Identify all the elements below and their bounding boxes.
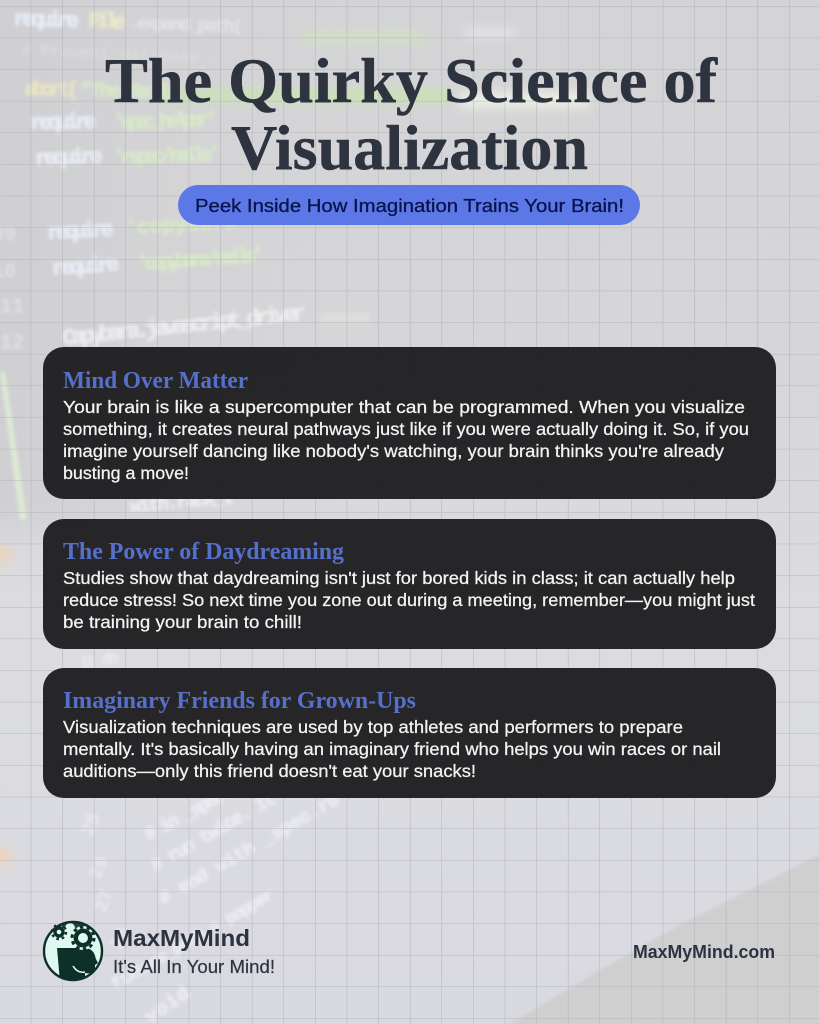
background: blurred code photo: 11 — [0, 296, 24, 319]
background: blurred code photo: with.rack_t — [129, 487, 235, 518]
panel: imaginary friends for grown-ups — [43, 668, 776, 798]
background: blurred code photo: 25 — [77, 810, 106, 839]
brand name: MaxMyMind — [113, 925, 250, 951]
background: blurred code photo: require — [46, 218, 114, 246]
background: blurred code photo: require — [51, 252, 120, 282]
background: blurred code photo: # in _spec.rb — [140, 773, 252, 846]
background: blurred code photo: fixture_path = popper — [108, 886, 278, 995]
heading: imaginary friends for grown-ups: Imaginary Friends for Grown-Ups — [63, 688, 416, 714]
text block: the power of daydreaming: reduce stress! So next time you zone out during a meeting, remember—you might just — [63, 590, 755, 610]
text block: the power of daydreaming: be training your brain to chill! — [63, 612, 302, 632]
text block: imaginary friends for grown-ups — [63, 717, 721, 781]
text block: mind over matter: Your brain is like a supercomputer that can be programmed. When you visualize — [63, 397, 745, 417]
background: blurred code photo: 'copybara/rails' — [136, 245, 265, 277]
title — [105, 46, 718, 183]
background: blurred code photo: 27 — [90, 887, 119, 916]
background: blurred code photo: .expand_path( — [128, 14, 243, 38]
text block: mind over matter: busting a move! — [63, 463, 189, 483]
title: The Quirky Science of — [105, 46, 718, 116]
background: blurred code photo: require — [13, 7, 80, 34]
background: blurred code photo: 28 — [106, 924, 135, 953]
background: blurred code photo: abort( — [24, 79, 79, 103]
text block: the power of daydreaming — [63, 568, 755, 632]
text block: imaginary friends for grown-ups: Visualization techniques are used by top athletes and performers to prepare — [63, 717, 683, 737]
heading: mind over matter: Mind Over Matter — [63, 368, 248, 394]
subtitle pill: Peek Inside How Imagination Trains Your Brain! — [195, 195, 624, 216]
title: Visualization — [231, 113, 588, 183]
text block: the power of daydreaming: Studies show that daydreaming isn't just for bored kids in class; it can actually help — [63, 568, 735, 588]
background: blurred code photo: # run twice. It is reco — [147, 751, 344, 877]
background: blurred code photo: "The Rails — [80, 80, 180, 105]
text block: mind over matter: imagine yourself dancing like nobody's watching, your brain thinks you're already — [63, 441, 724, 461]
background: blurred code photo: require — [30, 110, 97, 136]
background: blurred code photo: 'rspec/rails' — [112, 144, 221, 171]
panel: mind over matter — [43, 347, 776, 499]
text block: imaginary friends for grown-ups: auditions—only this friend doesn't eat your snacks! — [63, 761, 476, 781]
background: blurred code photo: 12 — [0, 332, 24, 355]
tagline: It's All In Your Mind! — [113, 957, 275, 977]
background: blurred code photo: 'spec_helper' — [112, 109, 218, 136]
icon: logo head with gears — [44, 918, 102, 982]
background: blurred code photo: File — [88, 9, 127, 35]
text block: mind over matter: something, it creates neural pathways just like if you were actually doing it. So, if you — [63, 419, 749, 439]
panel: the power of daydreaming — [43, 519, 776, 649]
subtitle pill — [178, 185, 640, 225]
background: blurred code photo: 'copybara' — [124, 211, 250, 241]
text block: imaginary friends for grown-ups: mentally. It's basically having an imaginary friend who helps you win races or nail — [63, 739, 721, 759]
background: blurred code photo: it do — [78, 650, 120, 674]
text block: mind over matter — [63, 397, 749, 483]
background: blurred code photo: Capybara.javascript_driver — [61, 300, 307, 352]
background: blurred code photo: require — [34, 145, 103, 172]
background: blurred code photo: # end with _spec.rb — [155, 789, 344, 910]
background: blurred code photo: # Prevent database — [20, 42, 200, 68]
background: blurred code photo: 26 — [85, 853, 114, 882]
heading: the power of daydreaming: The Power of Daydreaming — [63, 539, 344, 565]
website: MaxMyMind.com — [633, 942, 775, 962]
